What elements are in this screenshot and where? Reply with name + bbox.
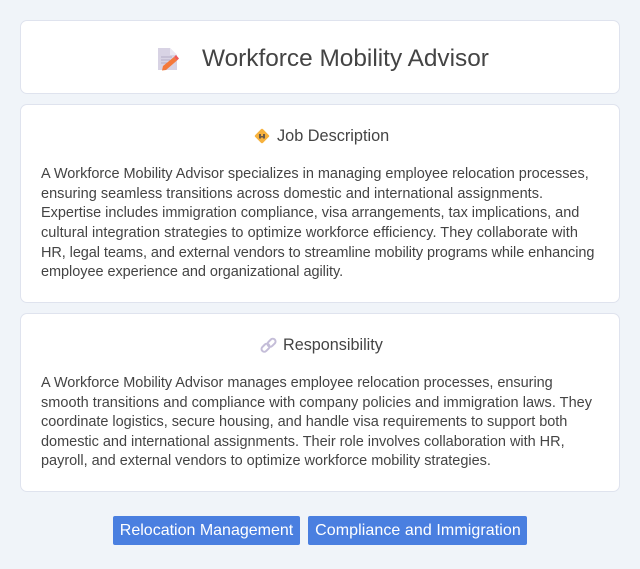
text block: responsibility (41, 375, 592, 469)
text block: job description: HR, legal teams, and external vendors to streamline mobility programs while enhancing (41, 245, 594, 261)
heading: job description: Job Description (277, 127, 389, 145)
tag: compliance and immigration: Compliance and Immigration (315, 522, 521, 539)
text block: responsibility: A Workforce Mobility Advisor manages employee relocation processes, ensuring (41, 375, 553, 391)
text block: responsibility: payroll, and external vendors to optimize workforce mobility strategies. (41, 453, 491, 469)
text block: responsibility: smooth transitions and compliance with company policies and immigration laws. They (41, 395, 592, 411)
icon: diamond sign (254, 128, 270, 144)
text block: job description: ensuring seamless transitions across domestic and international assignments. (41, 186, 543, 202)
icon: document with pencil (158, 48, 179, 70)
text block: job description (41, 166, 594, 280)
text block: job description: Expertise includes immigration compliance, visa arrangements, tax implications, and (41, 205, 579, 221)
title: Workforce Mobility Advisor (202, 45, 489, 72)
icon: chain link (260, 338, 276, 353)
tag: relocation management: Relocation Management (120, 522, 293, 539)
heading: responsibility: Responsibility (283, 336, 383, 354)
panel: job description (20, 104, 620, 303)
text block: job description: employee experience and organizational agility. (41, 264, 343, 280)
text block: responsibility: domestic and international assignments. Their role involves collaboration with HR, (41, 434, 565, 450)
tag: relocation management (113, 516, 300, 545)
text block: responsibility: coordinate logistics, secure housing, and handle visa requirements to support both (41, 414, 567, 430)
tag: compliance and immigration (308, 516, 527, 545)
panel: responsibility (20, 313, 620, 492)
header panel (20, 20, 620, 94)
text block: job description: A Workforce Mobility Advisor specializes in managing employee relocation processes, (41, 166, 589, 182)
text block: job description: cultural integration strategies to optimize workforce efficiency. They collaborate with (41, 225, 578, 241)
